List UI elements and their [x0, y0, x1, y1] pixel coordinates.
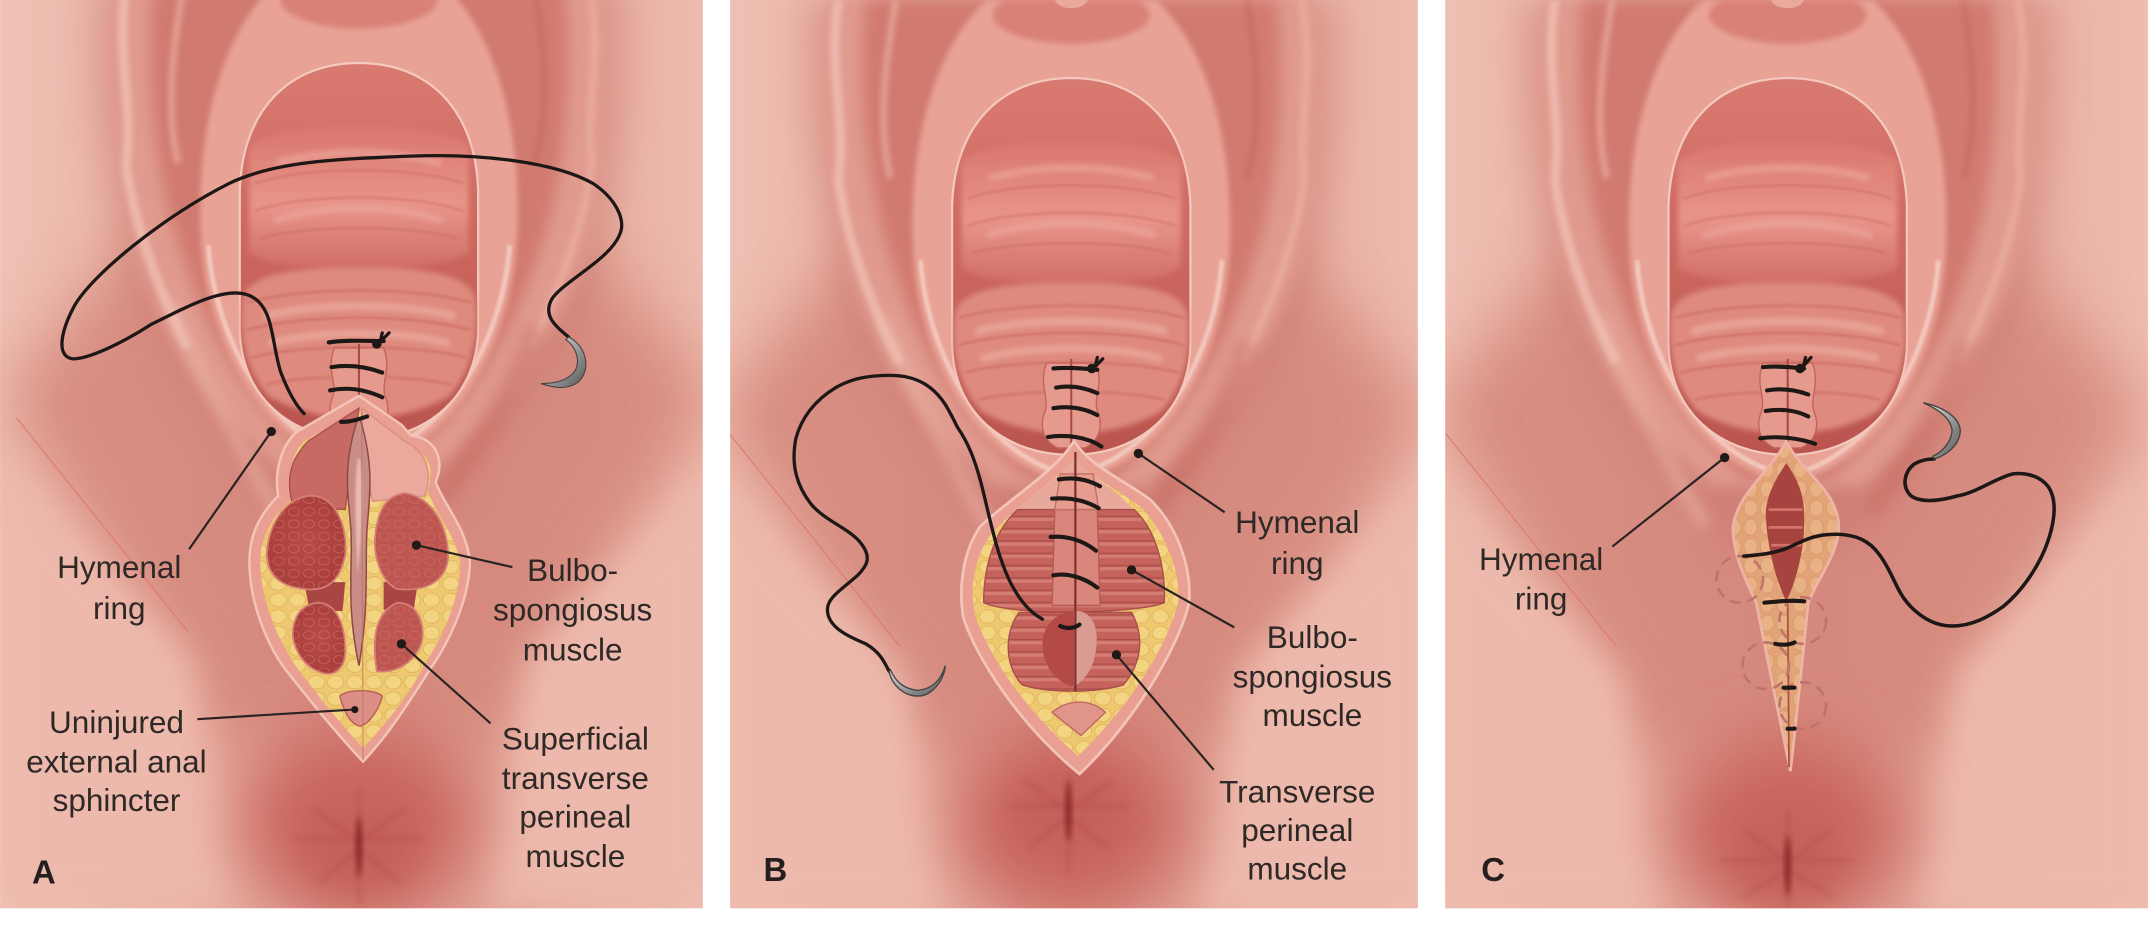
perineal shading C: [1671, 736, 1904, 922]
labels A: perineal: [519, 798, 631, 834]
anus B: [1007, 770, 1130, 877]
needle A: [541, 337, 586, 388]
anus C: [1721, 808, 1855, 911]
anus A: [296, 798, 422, 904]
leader lines B: [1112, 449, 1234, 770]
labels A: Hymenal: [57, 549, 181, 585]
labels B: Hymenal: [1235, 504, 1359, 540]
labels A: external anal: [26, 744, 207, 780]
labels C: Hymenal: [1479, 541, 1603, 577]
central cleft: [347, 419, 370, 666]
transverse muscle right: [375, 603, 423, 672]
transverse perineal muscle B: [1008, 612, 1140, 691]
perineal shading B: [955, 726, 1188, 918]
inner opening C: [1766, 463, 1804, 601]
letter B: B: [764, 851, 787, 888]
panel: B: [712, 0, 1432, 926]
labels A: Superficial: [502, 720, 649, 756]
labels B: Bulbo-: [1267, 619, 1358, 655]
stitches B: [1048, 358, 1103, 628]
suture thread A: [62, 156, 622, 414]
upper vaginal wall flaps: [289, 408, 359, 510]
labels A: sphincter: [53, 782, 180, 818]
labels B: ring: [1271, 545, 1324, 581]
suture thread B: [794, 375, 1042, 671]
bulbospongiosus muscle right: [375, 493, 448, 589]
labels C: ring: [1515, 581, 1567, 617]
suture thread C: [1744, 459, 2054, 626]
leader lines A: [189, 427, 512, 723]
central wound B: [1042, 611, 1097, 686]
stitches A: [329, 333, 389, 422]
muscle connection: [304, 582, 418, 611]
labels A: Uninjured: [49, 704, 184, 740]
needle C: [1923, 403, 1960, 459]
panel: A: [0, 0, 719, 918]
perineal shading A: [243, 726, 475, 918]
transverse muscle left: [293, 603, 345, 674]
wound A: [249, 396, 470, 762]
labels A: muscle: [523, 631, 623, 667]
labels B: perineal: [1241, 812, 1353, 848]
labels A: [26, 549, 652, 874]
labels B: [1219, 504, 1392, 886]
dashed circles C: [1716, 556, 1826, 729]
letter C: C: [1481, 851, 1505, 888]
labels A: muscle: [525, 838, 625, 874]
wound B: [961, 441, 1189, 774]
panel: C: [1429, 0, 2148, 926]
stitches C: [1760, 358, 1815, 729]
small triangle sphincter B: [1052, 702, 1106, 736]
bulbospongiosus muscle B: [984, 510, 1165, 612]
labels A: transverse: [502, 760, 649, 796]
labels A: ring: [93, 590, 145, 626]
bulbospongiosus muscle left: [267, 496, 346, 589]
labels B: muscle: [1247, 850, 1347, 886]
labels B: Transverse: [1219, 774, 1375, 810]
leader line C: [1612, 453, 1729, 547]
background anatomy A: [0, 0, 719, 911]
labels A: spongiosus: [493, 592, 652, 628]
letter A: A: [32, 854, 56, 891]
labels A: Bulbo-: [527, 552, 618, 588]
labels B: spongiosus: [1233, 659, 1392, 695]
needle B: [889, 666, 945, 696]
labels B: muscle: [1262, 697, 1362, 733]
wound C: [1733, 441, 1839, 771]
labels C: [1479, 541, 1603, 617]
background anatomy C: [1429, 0, 2148, 926]
sphincter: [340, 691, 382, 726]
background anatomy B: [712, 0, 1432, 926]
